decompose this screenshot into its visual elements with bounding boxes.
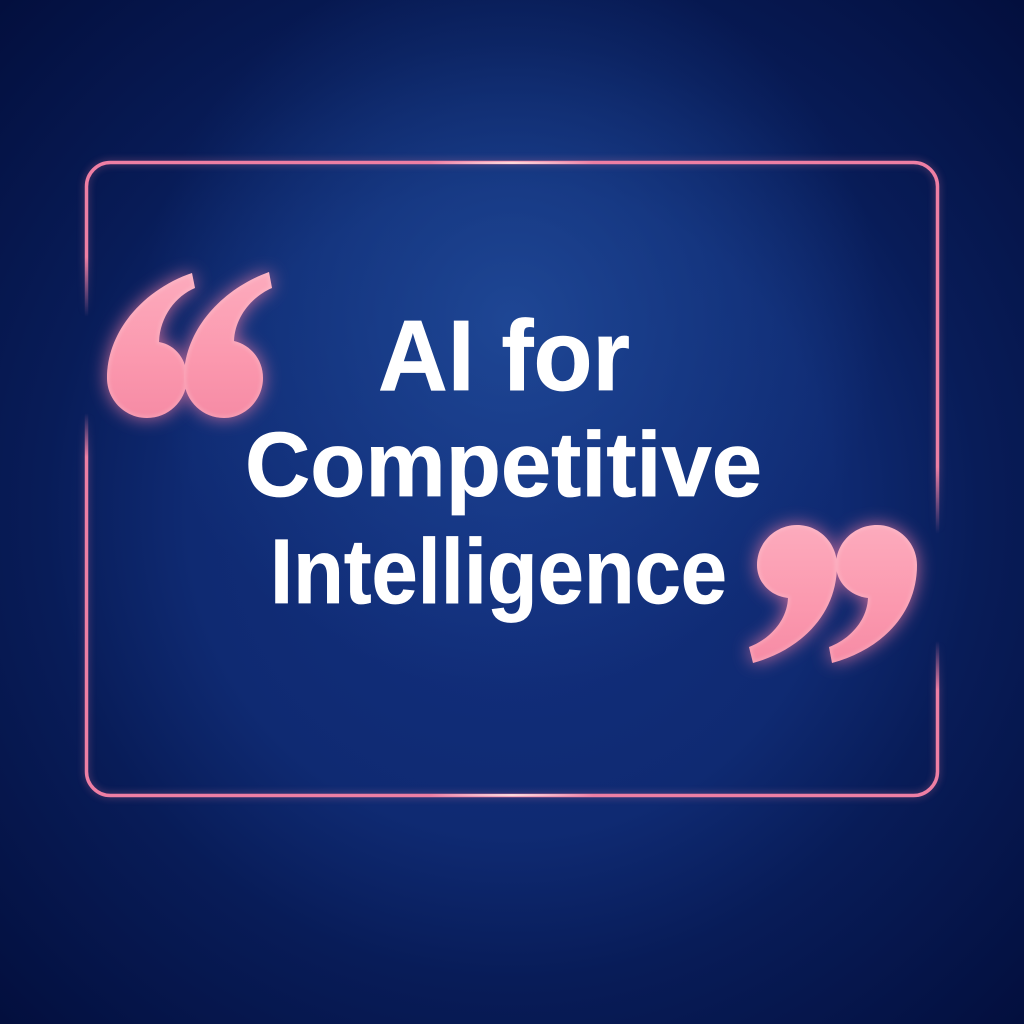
icon: closing quotation marks: [749, 525, 917, 663]
title: [245, 300, 762, 623]
title: Competitive: [245, 414, 762, 516]
title: AI for: [378, 300, 630, 412]
icon: opening quotation marks: [107, 272, 272, 418]
panel: glowing rounded frame: [86, 162, 938, 796]
title: Intelligence: [270, 521, 727, 623]
